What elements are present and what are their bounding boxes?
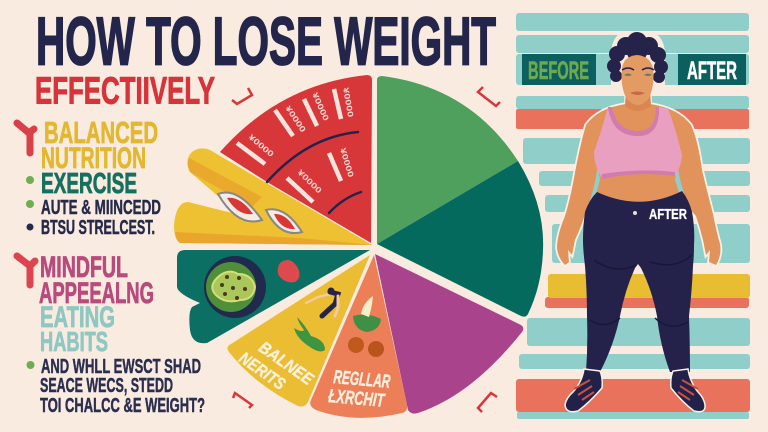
red slice labels: ¥0000 — [341, 87, 355, 119]
heading: habits: HABITS — [40, 326, 108, 357]
text line: AND WHLL EWSCT SHAD — [41, 355, 201, 378]
leg shading — [590, 255, 692, 326]
face — [622, 55, 654, 105]
red slice labels: ¥0000 — [283, 104, 308, 135]
pie chart — [174, 75, 543, 418]
slice: upper yellow wedges — [174, 148, 372, 245]
icon: red fruit — [278, 260, 299, 282]
text line: AUTE & MIINCEDD — [41, 196, 161, 219]
red slice labels: ¥0000 — [310, 91, 331, 123]
label: before: BEFORE — [528, 57, 589, 85]
icon: orange fruit — [368, 341, 384, 357]
heading: mindful: MINDFUL — [40, 251, 128, 284]
orange slice contents — [327, 296, 391, 412]
waistband label: after: AFTER — [649, 206, 687, 223]
button — [633, 211, 637, 215]
bowl inner — [206, 262, 256, 312]
bowl food — [212, 272, 255, 301]
arc line outer — [267, 132, 358, 182]
slice: dark teal right — [377, 161, 543, 317]
top band — [602, 107, 675, 179]
bullet: exercise — [26, 176, 34, 184]
label: exrchit: ŁXRCHIT — [327, 386, 386, 412]
person illustration — [557, 32, 720, 412]
orange band upper wedge — [188, 158, 262, 207]
text line: SEACE WECS, STEDD — [40, 375, 173, 397]
white label strips — [237, 89, 341, 202]
red slice labels: ¥0000 — [296, 168, 324, 196]
icon: cream leaf — [361, 296, 373, 317]
bullet — [26, 200, 34, 208]
label: balnee nerits: BALNEE — [255, 338, 317, 389]
heading: exercise: EXERCISE — [41, 168, 137, 200]
icon: almond right — [266, 209, 302, 233]
arms and torso skin — [557, 90, 720, 265]
slice: purple — [375, 254, 523, 414]
mouth — [630, 92, 645, 95]
arm gaps — [585, 163, 692, 214]
red slice labels: ¥0000 — [247, 133, 276, 159]
icon: shoe right — [671, 369, 705, 412]
icon: exercising figure — [306, 288, 338, 316]
label: balnee nerits: NERITS — [236, 348, 289, 394]
corner bracket top left — [232, 88, 252, 104]
pink sports top — [594, 107, 682, 178]
slice: orange — [310, 255, 407, 418]
heading: balanced: BALANCED — [44, 115, 158, 150]
bullet — [26, 361, 34, 369]
subtitle: EFFECTIIVELY — [35, 70, 215, 112]
slice: yellow with text — [227, 255, 370, 406]
brows and eyes — [622, 68, 654, 70]
label: after — [678, 54, 746, 85]
label: regular: REGLLAR — [333, 367, 391, 393]
neck shade — [625, 90, 651, 111]
label: before — [522, 54, 596, 85]
heading: appealing: APPEEALNG — [39, 277, 154, 310]
corner bracket bottom left — [233, 393, 252, 408]
leggings — [583, 191, 694, 372]
seeds — [220, 275, 247, 300]
text line: BTSU STRELCEST. — [41, 217, 155, 239]
icon: salad bowl — [353, 315, 381, 332]
slice: green — [377, 76, 518, 244]
icon: red branch marker — [17, 256, 35, 285]
slice: red with labels — [220, 75, 372, 243]
background stripes — [516, 13, 750, 419]
orange band lower wedge — [175, 232, 372, 245]
slice: dark teal left with bowl — [177, 250, 370, 343]
text line: TOI CHALCC &E WEIGHT? — [40, 395, 205, 417]
icon: green leaf — [294, 317, 325, 351]
red slice labels — [247, 87, 356, 196]
icon: red branch marker — [17, 123, 34, 153]
icon: bowl of greens — [204, 256, 266, 318]
label: after: AFTER — [687, 57, 737, 85]
cream gap behind head — [611, 31, 665, 88]
bullet — [26, 224, 34, 230]
corner bracket top right — [478, 87, 500, 106]
heading: eating: EATING — [40, 301, 115, 334]
left column: balanced nutrition list — [17, 115, 161, 239]
corner bracket bottom right — [478, 393, 497, 412]
arc line inner — [329, 192, 361, 213]
red slice labels: ¥0000 — [338, 147, 356, 179]
hair — [607, 32, 668, 83]
icon: orange fruit — [348, 337, 364, 353]
icon: almond left — [218, 192, 262, 222]
heading: nutrition: NUTRITION — [41, 142, 146, 175]
label: balnee nerits — [236, 332, 317, 406]
icon: shoe left — [565, 369, 602, 412]
left column: mindful eating list — [17, 251, 205, 417]
